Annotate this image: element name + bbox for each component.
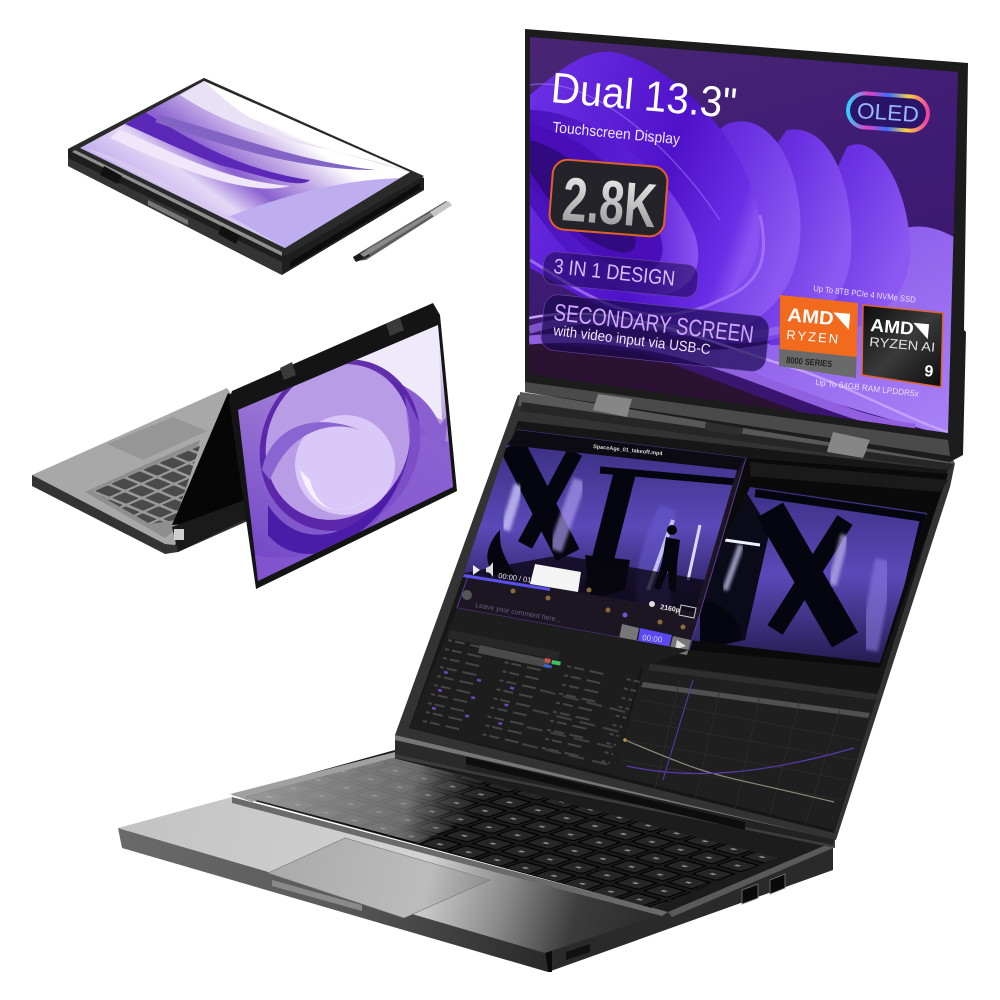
AMD Ryzen AI 9 badge <box>862 305 943 387</box>
secondary screen pill <box>540 293 770 373</box>
lower hinge bar <box>395 735 835 848</box>
main laptop <box>118 392 955 972</box>
upper screen <box>525 30 965 440</box>
bottom left timeline list <box>409 608 689 775</box>
tent hinge and bezel <box>229 303 457 589</box>
maroon lower band <box>529 342 948 433</box>
title text: Dual 13.3" <box>549 64 739 128</box>
trackpad <box>268 838 490 918</box>
2.8K badge <box>548 159 669 241</box>
AMD Ryzen 8000 badge: RYZEN <box>786 327 841 347</box>
tent mode device <box>32 303 460 589</box>
tent keyboard base <box>32 388 250 554</box>
palm rest <box>118 797 668 953</box>
silhouette figure <box>654 525 680 592</box>
graph editor chart <box>614 662 878 830</box>
tablet mode device <box>68 70 424 275</box>
keyboard deck <box>232 750 835 912</box>
hinge left <box>593 395 632 417</box>
AMD Ryzen AI 9 badge: AMD◥ <box>870 315 930 340</box>
AMD Ryzen 8000 badge: 8000 SERIES <box>786 355 833 369</box>
secondary screen pill: SECONDARY SCREEN <box>552 299 755 349</box>
AMD Ryzen 8000 badge <box>779 295 858 378</box>
comment box: Leave your comment here... <box>475 602 562 624</box>
3 in 1 design pill: 3 IN 1 DESIGN <box>552 255 676 291</box>
usb ports <box>742 874 785 904</box>
lower screen panel <box>409 421 948 833</box>
lower screen bezel <box>395 395 955 840</box>
stylus pen <box>353 201 452 262</box>
upper screen bezel <box>525 29 968 462</box>
lower screen panel: SpaceAge_01_takeoff.mp4 <box>593 444 664 457</box>
hinge right <box>827 433 870 458</box>
center camera bump <box>704 419 744 436</box>
subtitle text: Touchscreen Display <box>552 119 681 148</box>
storage note: Up To 8TB PCIe 4 NVMe SSD <box>813 283 916 305</box>
left video player panel: 2160p <box>660 604 680 614</box>
send buttons <box>618 624 639 648</box>
hinge tabs over upper screen bottom <box>525 382 950 457</box>
player controls: 00:00 / 01:00 <box>498 571 542 586</box>
hinge band between screens <box>518 392 955 470</box>
ram note: Up To 64GB RAM LPDDR5x <box>815 377 920 399</box>
OLED badge: OLED <box>856 98 920 127</box>
left video player panel <box>457 430 750 655</box>
right video panel <box>692 487 927 663</box>
wallpaper <box>525 30 965 440</box>
2.8K badge: 2.8K <box>560 165 659 241</box>
laptop base <box>118 750 835 972</box>
secondary screen pill: with video input via USB-C <box>552 323 711 358</box>
AMD Ryzen AI 9 badge: RYZEN AI <box>869 334 936 355</box>
left video player panel: 00:00 <box>642 633 663 644</box>
keyboard keys <box>245 758 778 908</box>
right app dark panel <box>689 458 948 668</box>
tablet screen wallpaper <box>80 81 410 248</box>
AMD Ryzen AI 9 badge: 9 <box>924 363 934 381</box>
right side wall <box>545 842 833 972</box>
AMD Ryzen 8000 badge: AMD◥ <box>787 305 851 331</box>
tent screen wallpaper <box>230 320 460 585</box>
OLED badge <box>847 92 929 132</box>
front wall <box>118 828 548 972</box>
